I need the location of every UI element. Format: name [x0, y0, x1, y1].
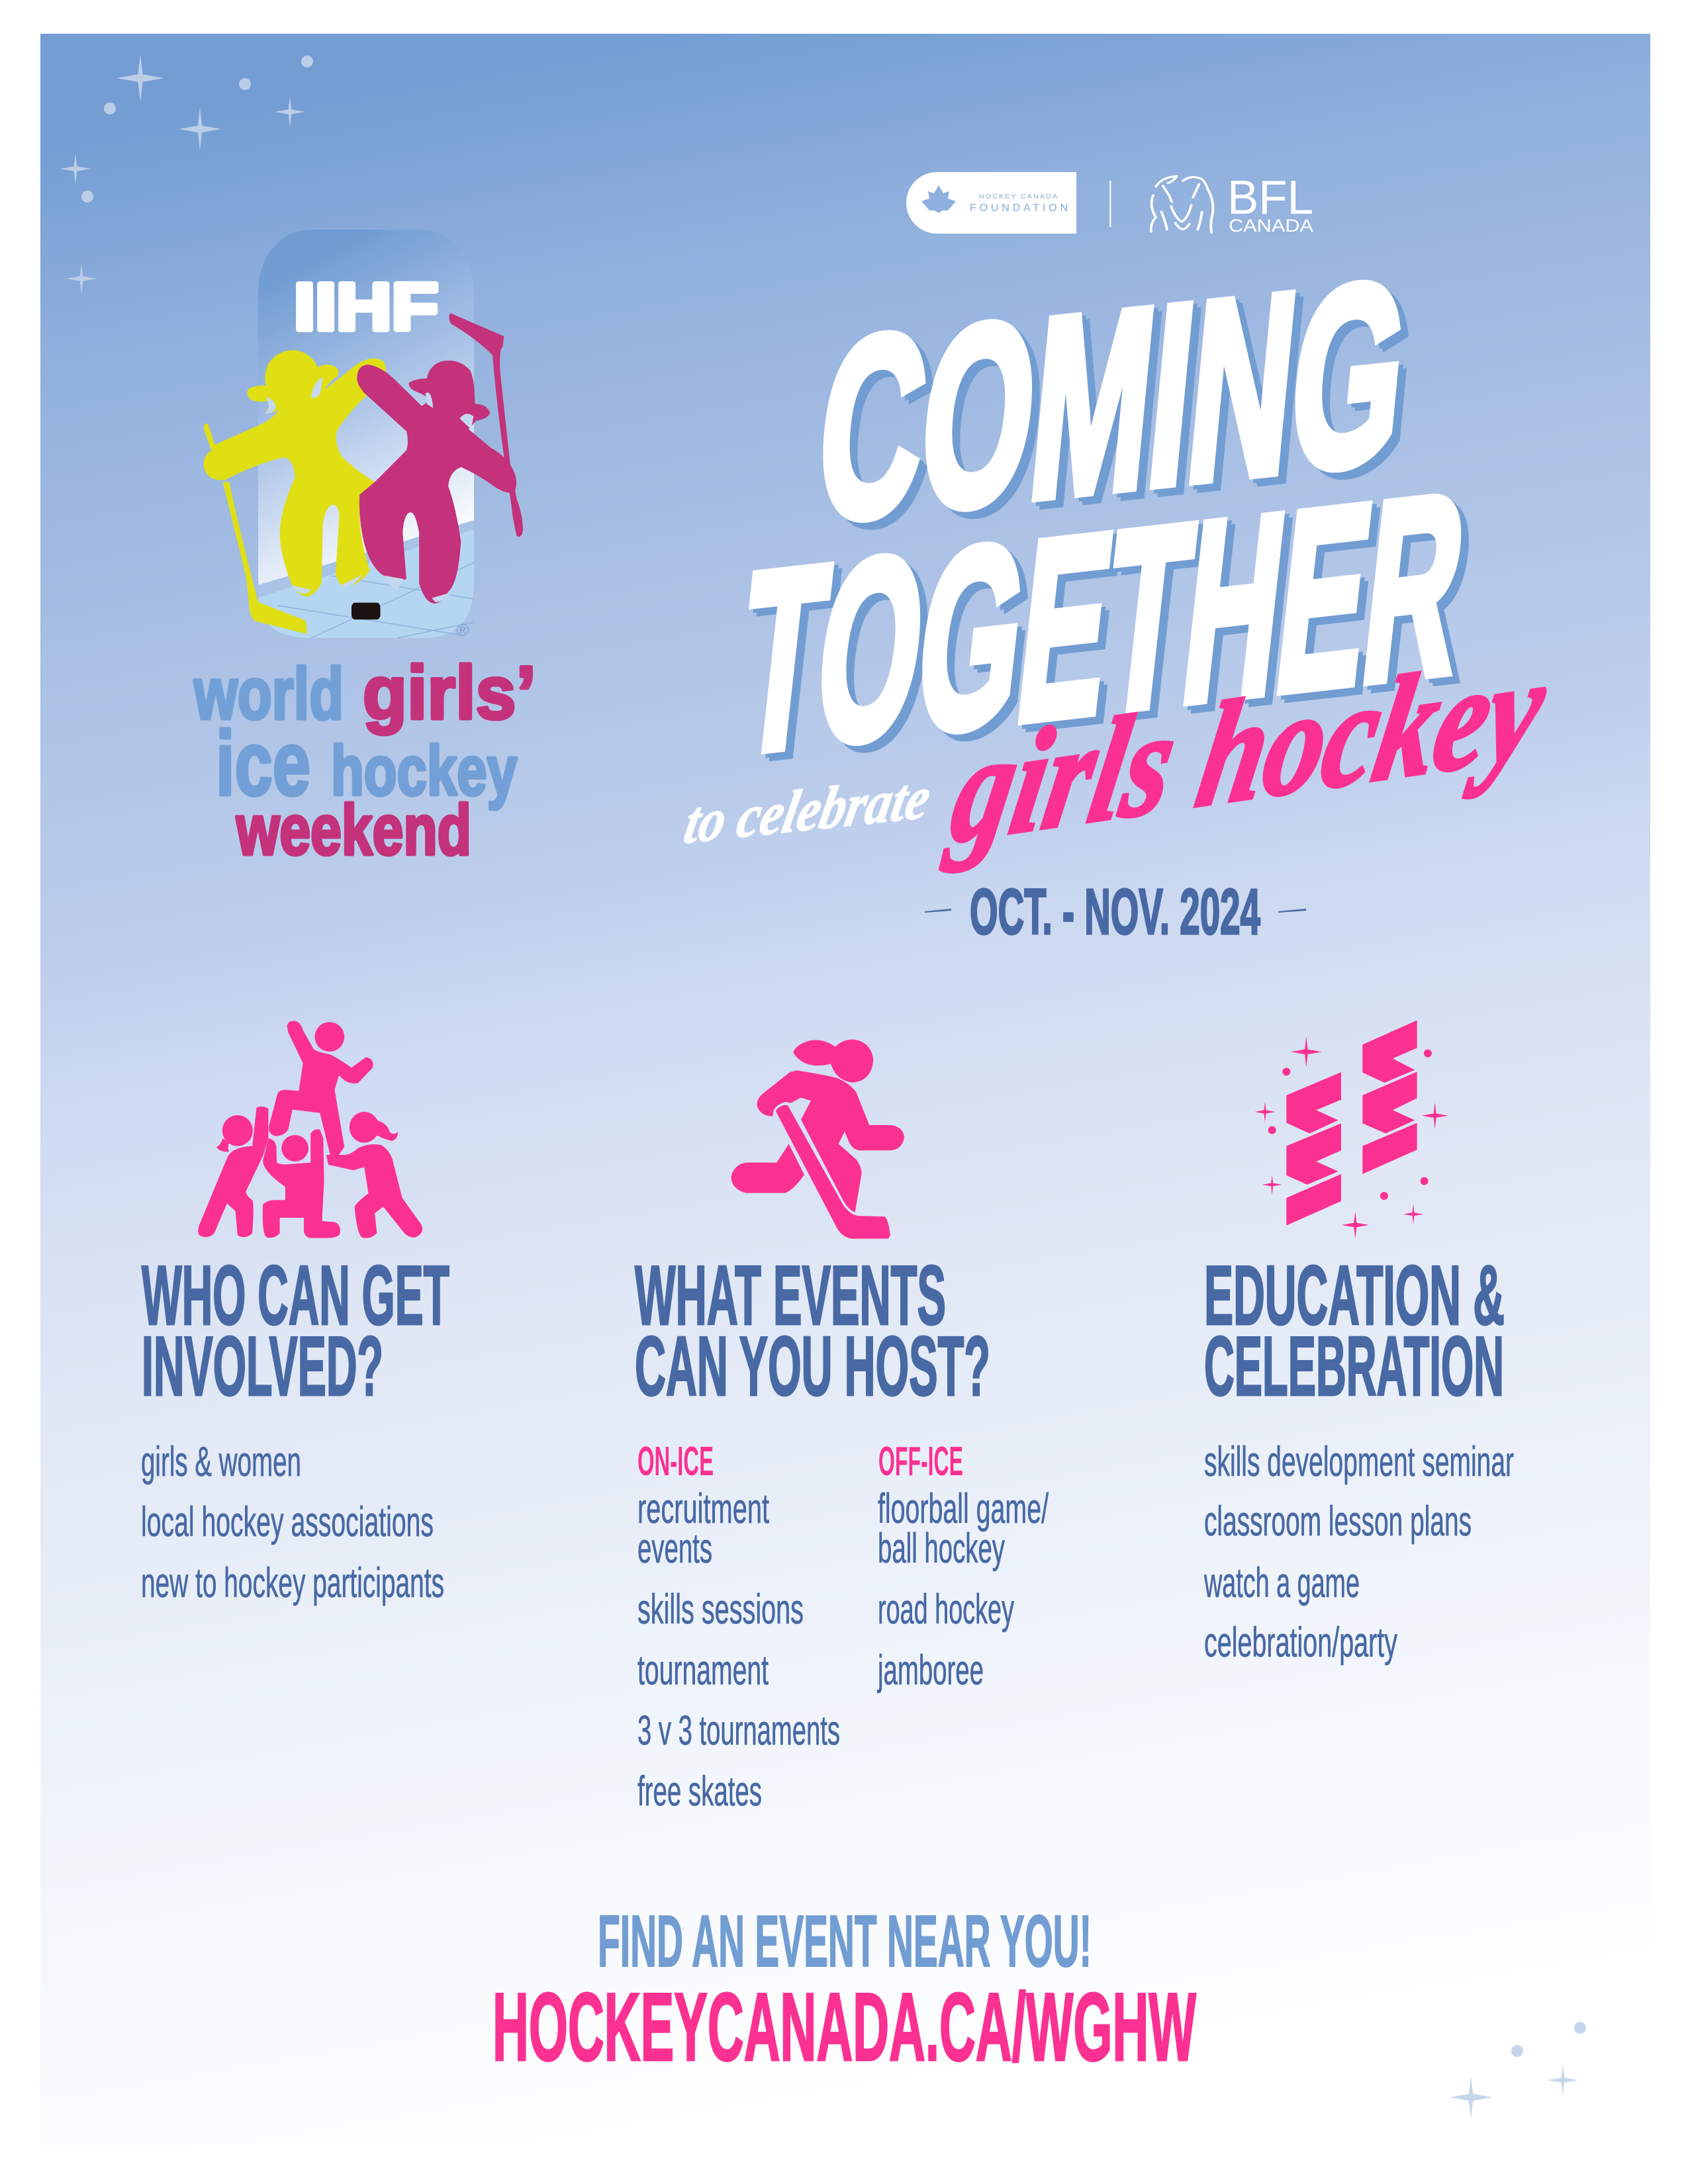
date	[925, 876, 1306, 948]
panel: education and celebration	[1203, 1248, 1514, 1666]
list: off-ice events: floorball game/	[878, 1486, 1049, 1532]
player cut-outs: ear gaps and skates	[265, 377, 473, 602]
heading: what events can you host: WHAT EVENTS	[635, 1248, 946, 1342]
registered mark: ®	[456, 620, 469, 640]
list: activities: watch a game	[1203, 1560, 1360, 1606]
heading: education and celebration	[1204, 1248, 1505, 1413]
panel: what events can you host	[635, 1248, 1049, 1815]
list: activities	[1203, 1439, 1514, 1666]
list: on-ice events: 3 v 3 tournaments	[637, 1707, 840, 1754]
logo word: hockey: hockey	[331, 732, 517, 810]
logo: IIHF world girls' ice hockey weekend	[193, 230, 536, 870]
lion icon	[1151, 176, 1213, 233]
title: COMING	[807, 226, 1426, 583]
divider	[1109, 181, 1111, 227]
logo word: ice: ice	[216, 713, 310, 815]
foundation name: HOCKEY CANADA	[979, 193, 1057, 201]
list: off-ice events: OFF-ICE	[878, 1439, 963, 1484]
list: off-ice events: road hockey	[878, 1586, 1014, 1633]
list: activities: classroom lesson plans	[1204, 1498, 1472, 1545]
list: on-ice events: recruitment	[637, 1486, 769, 1532]
sponsor logo: BFL Canada: CANADA	[1229, 216, 1313, 236]
icon: teamwork people pyramid	[198, 1021, 422, 1238]
list: participants: new to hockey participants	[141, 1560, 444, 1606]
heading: what events can you host: CAN YOU HOST?	[635, 1319, 990, 1413]
maple leaf	[921, 185, 956, 213]
call to action	[492, 1901, 1196, 2081]
list: off-ice events: ball hockey	[878, 1525, 1005, 1572]
sponsor logo: BFL Canada	[1151, 171, 1313, 236]
list: on-ice events	[637, 1439, 840, 1815]
heading: who can get involved: INVOLVED?	[142, 1319, 383, 1413]
puck	[352, 603, 381, 619]
list: off-ice events: jamboree	[877, 1647, 984, 1694]
magenta player	[357, 313, 523, 604]
panel: who can get involved	[141, 1248, 449, 1606]
date: OCT. - NOV. 2024	[970, 876, 1260, 948]
logo figures	[204, 313, 523, 634]
heading: who can get involved: WHO CAN GET	[142, 1248, 449, 1342]
icon: ribbons and sparkles	[1254, 1021, 1448, 1239]
list: on-ice events: ON-ICE	[637, 1439, 714, 1484]
title: TOGETHER	[727, 438, 1485, 815]
sparkles: bottom right	[1450, 2022, 1586, 2118]
sparkles: top left	[60, 54, 313, 294]
BFL wordmark: BFL	[1227, 171, 1313, 224]
list: on-ice events: free skates	[637, 1768, 762, 1815]
logo word: weekend: weekend	[236, 790, 471, 870]
heading: what events can you host	[635, 1248, 990, 1413]
date dashes	[925, 909, 1306, 913]
list: participants: local hockey associations	[141, 1499, 434, 1545]
list: activities: celebration/party	[1204, 1619, 1397, 1666]
sponsor logo: Hockey Canada Foundation: FOUNDATION	[970, 203, 1068, 214]
script: to celebrate: to celebrate	[679, 764, 936, 857]
list: on-ice events: skills sessions	[637, 1586, 804, 1633]
list: on-ice events: tournament	[637, 1647, 769, 1694]
sponsor logo: Hockey Canada Foundation	[906, 172, 1076, 234]
list: on-ice events: events	[637, 1525, 712, 1572]
logo shield	[258, 230, 474, 638]
list: participants: girls & women	[141, 1439, 301, 1485]
icon: hockey skater	[731, 1040, 904, 1239]
list: off-ice events	[877, 1439, 1049, 1694]
heading: who can get involved	[142, 1248, 449, 1413]
logo word: world: world	[193, 653, 344, 735]
list: participants	[141, 1439, 444, 1606]
find an event: FIND AN EVENT NEAR YOU!	[598, 1901, 1092, 1982]
logo word: girls: girls’	[363, 651, 536, 735]
IIHF wordmark: IIHF	[294, 270, 438, 344]
yellow player	[204, 350, 386, 634]
